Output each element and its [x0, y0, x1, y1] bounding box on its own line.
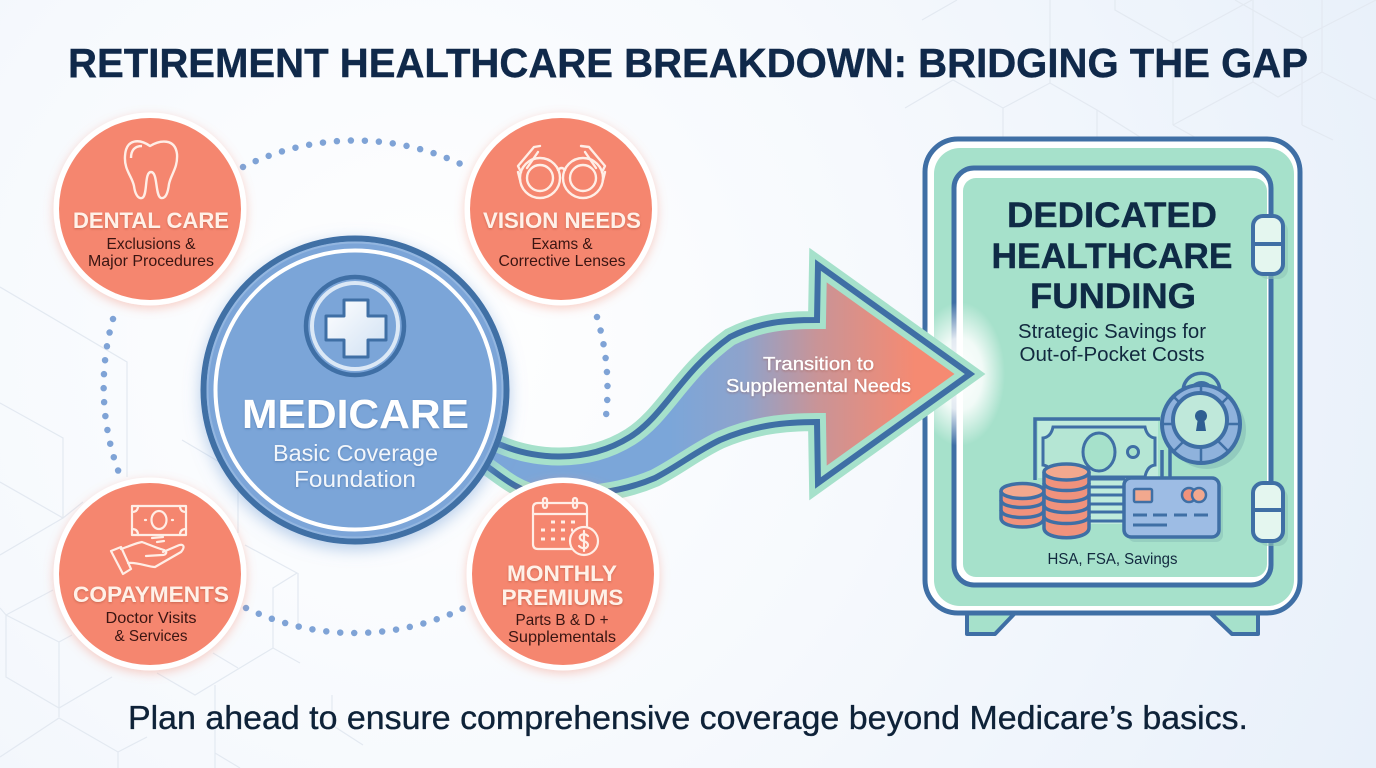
- text: dental care detail: Major Procedures: [88, 253, 214, 270]
- icon: cash: [1035, 419, 1170, 524]
- hinge top: [1253, 216, 1288, 279]
- text: monthly premiums detail: Supplementals: [508, 629, 616, 646]
- heading: monthly premiums: [502, 561, 624, 610]
- safe heading: DEDICATED: [1007, 196, 1217, 235]
- text: vision needs detail: Corrective Lenses: [498, 253, 626, 270]
- icon: medical cross badge: [306, 277, 404, 375]
- heading: copayments: COPAYMENTS: [73, 582, 229, 607]
- icon: glasses: [518, 146, 605, 198]
- safe subheading: Strategic Savings for: [1018, 321, 1206, 343]
- transition arrow: [485, 265, 970, 495]
- heading: monthly premiums: MONTHLY: [507, 561, 617, 586]
- safe door: [954, 168, 1271, 585]
- arrow label: [726, 354, 911, 396]
- icon: padlock dial: [1162, 373, 1246, 469]
- text: medicare detail: [273, 440, 438, 492]
- icon: tall coin stack: [1044, 464, 1089, 538]
- safe heading: [992, 196, 1232, 316]
- text: monthly premiums detail: [508, 612, 616, 646]
- safe subheading: [1018, 321, 1206, 366]
- arrow tip glow: [915, 302, 1005, 446]
- icon: short coin stack: [1001, 484, 1044, 527]
- safe heading: HEALTHCARE: [992, 237, 1232, 276]
- dotted cycle ring: [104, 141, 607, 633]
- panel: medicare: [204, 238, 506, 542]
- text: dental care detail: [88, 236, 214, 270]
- text: copayments detail: & Services: [114, 628, 188, 645]
- text: copayments detail: [106, 610, 196, 645]
- footer tagline: Plan ahead to ensure comprehensive coverage beyond Medicare’s basics.: [128, 699, 1248, 736]
- hinge bottom: [1253, 483, 1288, 546]
- panel: copayments: [54, 478, 246, 670]
- icon: tooth: [125, 141, 177, 198]
- safe caption: HSA, FSA, Savings: [1048, 551, 1178, 568]
- arrow label: Transition to: [763, 354, 874, 374]
- safe body: [925, 139, 1300, 613]
- text: medicare detail: Foundation: [294, 466, 416, 492]
- safe feet: [967, 611, 1258, 634]
- panel: dedicated healthcare funding safe: [925, 139, 1300, 634]
- text: medicare detail: Basic Coverage: [273, 440, 438, 466]
- icon: credit card: [1124, 478, 1223, 542]
- heading: medicare: MEDICARE: [242, 391, 469, 437]
- title: RETIREMENT HEALTHCARE BREAKDOWN: BRIDGING THE GAP: [68, 40, 1308, 86]
- text: copayments detail: Doctor Visits: [106, 610, 196, 627]
- arrow label: Supplemental Needs: [726, 376, 911, 396]
- safe heading: FUNDING: [1030, 277, 1196, 316]
- text: vision needs detail: [498, 236, 626, 270]
- panel: monthly premiums: [466, 478, 660, 670]
- text: monthly premiums detail: Parts B & D +: [516, 612, 608, 629]
- text: dental care detail: Exclusions &: [106, 236, 196, 253]
- panel: dental care: [54, 112, 246, 306]
- text: vision needs detail: Exams &: [532, 236, 593, 253]
- safe subheading: Out-of-Pocket Costs: [1020, 344, 1204, 366]
- icon: calendar with dollar: [533, 498, 598, 555]
- panel: vision needs: [464, 112, 658, 306]
- heading: monthly premiums: PREMIUMS: [502, 585, 624, 610]
- heading: dental care: DENTAL CARE: [73, 208, 229, 233]
- icon: money over hand: [111, 506, 186, 574]
- heading: vision needs: VISION NEEDS: [483, 208, 641, 233]
